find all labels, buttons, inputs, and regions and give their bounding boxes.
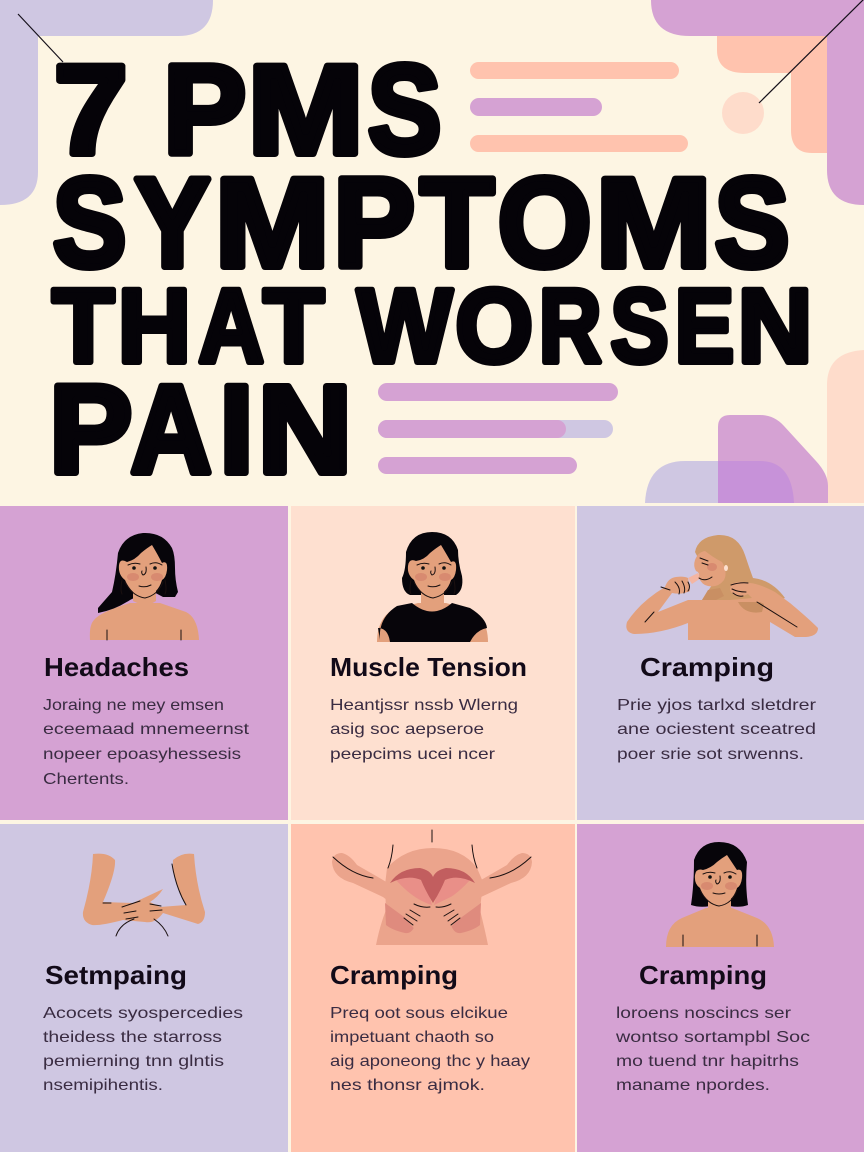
header decoration: bottom-right shapes [645, 350, 864, 503]
description: eceemaad mnemeernst [43, 721, 250, 738]
description [615, 1005, 810, 1094]
panel: cramping (purple) [577, 824, 864, 1152]
title: T [52, 268, 114, 385]
heading: Cramping: Cramping [640, 652, 774, 682]
heading: Muscle Tension: Muscle Tension [330, 652, 527, 682]
title: I [220, 360, 254, 500]
title: S [610, 268, 669, 385]
panel: muscle tension [291, 506, 575, 820]
description: mo tuend tnr hapitrhs [616, 1053, 799, 1070]
panel: cramping (lavender) [577, 506, 864, 820]
icon: clasped hands and arms [83, 854, 205, 936]
heading: Setmpaing: Setmpaing [45, 960, 187, 990]
description: Preq oot sous elcikue [330, 1005, 508, 1022]
title: M [248, 38, 364, 180]
header decoration: top-left shapes [0, 0, 213, 205]
description: Heantjssr nssb Wlerng [330, 697, 518, 714]
description [330, 697, 518, 763]
title: S [715, 152, 790, 294]
description: nopeer epoasyhessesis [43, 746, 241, 763]
description: ane ociestent sceatred [617, 721, 816, 738]
title: N [738, 268, 812, 385]
title: S [368, 38, 441, 180]
description: theidess the starross [43, 1029, 222, 1046]
icon: woman touching face and neck [626, 535, 818, 640]
title: S [53, 152, 126, 294]
title: O [455, 268, 533, 385]
description: nes thonsr ajmok. [330, 1077, 485, 1094]
panel background [577, 506, 864, 820]
panel background [0, 506, 288, 820]
title: M [596, 152, 712, 294]
panel: headaches [0, 506, 288, 820]
panel background [291, 824, 575, 1152]
title: A [130, 360, 212, 500]
description: impetuant chaoth so [330, 1029, 494, 1046]
heading: Cramping: Cramping [330, 960, 458, 990]
panel background [291, 506, 575, 820]
header decoration: top-right shapes [651, 0, 864, 205]
title: M [215, 152, 330, 294]
panel: cramping (peach) [291, 824, 575, 1152]
title: P [49, 360, 132, 500]
title: T [263, 268, 324, 385]
title [49, 38, 812, 500]
panel background [577, 824, 864, 1152]
title: P [333, 152, 415, 294]
title: N [258, 360, 352, 500]
header decoration: bars beside first title line [470, 62, 688, 152]
description [330, 1005, 530, 1094]
icon: pelvis with uterus and hands [332, 830, 532, 945]
description: nsemipihentis. [43, 1077, 163, 1094]
description: pemierning tnn glntis [43, 1053, 224, 1070]
heading: Headaches: Headaches [44, 652, 189, 682]
title: E [675, 268, 734, 385]
icon: woman with long hair [90, 533, 199, 640]
heading: Cramping: Cramping [639, 960, 767, 990]
description [617, 697, 817, 763]
description [43, 697, 250, 788]
title: H [118, 268, 191, 385]
description: Chertents. [43, 771, 129, 788]
icon: woman with black shirt [377, 532, 488, 642]
title: P [163, 38, 246, 180]
title: T [420, 152, 494, 294]
title: R [539, 268, 602, 385]
title: 7 [54, 38, 128, 180]
title: Y [134, 152, 210, 294]
icon: woman with short black hair [666, 842, 774, 947]
description: aig aponeong thc y haay [330, 1053, 530, 1070]
description: peepcims ucei ncer [330, 746, 496, 763]
panel: setmpaing [0, 824, 288, 1152]
panel background [0, 824, 288, 1152]
description: wontso sortampbl Soc [615, 1029, 810, 1046]
header decoration: bars beside PAIN [378, 383, 618, 474]
title: W [357, 268, 452, 385]
description: poer srie sot srwenns. [617, 746, 804, 763]
title: A [198, 268, 264, 385]
description: Joraing ne mey emsen [43, 697, 224, 714]
description: maname npordes. [616, 1077, 770, 1094]
description: Acocets syospercedies [43, 1005, 243, 1022]
description: Prie yjos tarlxd sletdrer [617, 697, 817, 714]
description: loroens noscincs ser [616, 1005, 792, 1022]
description: asig soc aepseroe [330, 721, 484, 738]
description [43, 1005, 243, 1094]
title: O [498, 152, 592, 294]
